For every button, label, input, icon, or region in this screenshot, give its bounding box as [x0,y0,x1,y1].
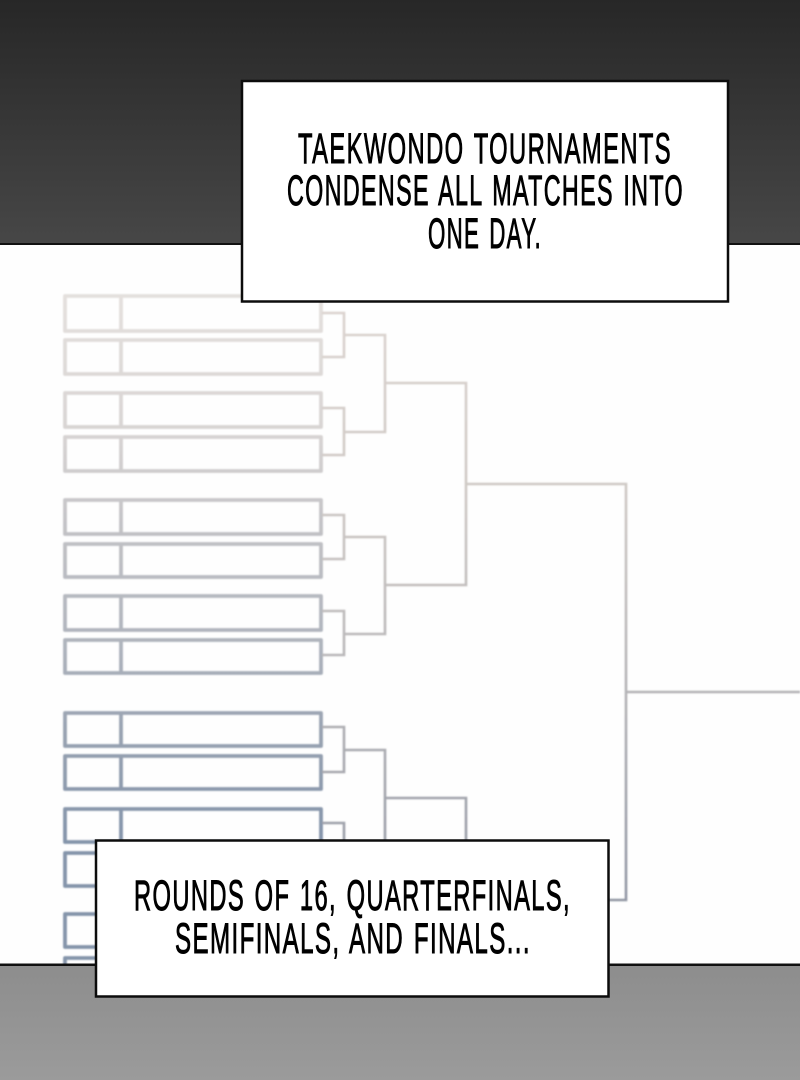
entry boxes [65,296,321,990]
caption: bottom: SEMIFINALS, AND FINALS... [175,915,531,963]
top dark band [0,0,800,245]
caption: bottom [96,840,608,996]
bracket connector lines [322,313,800,900]
tournament bracket [65,296,800,990]
bottom grey band [0,964,800,1080]
caption: top: ONE DAY. [428,210,542,258]
caption: top [242,81,728,302]
